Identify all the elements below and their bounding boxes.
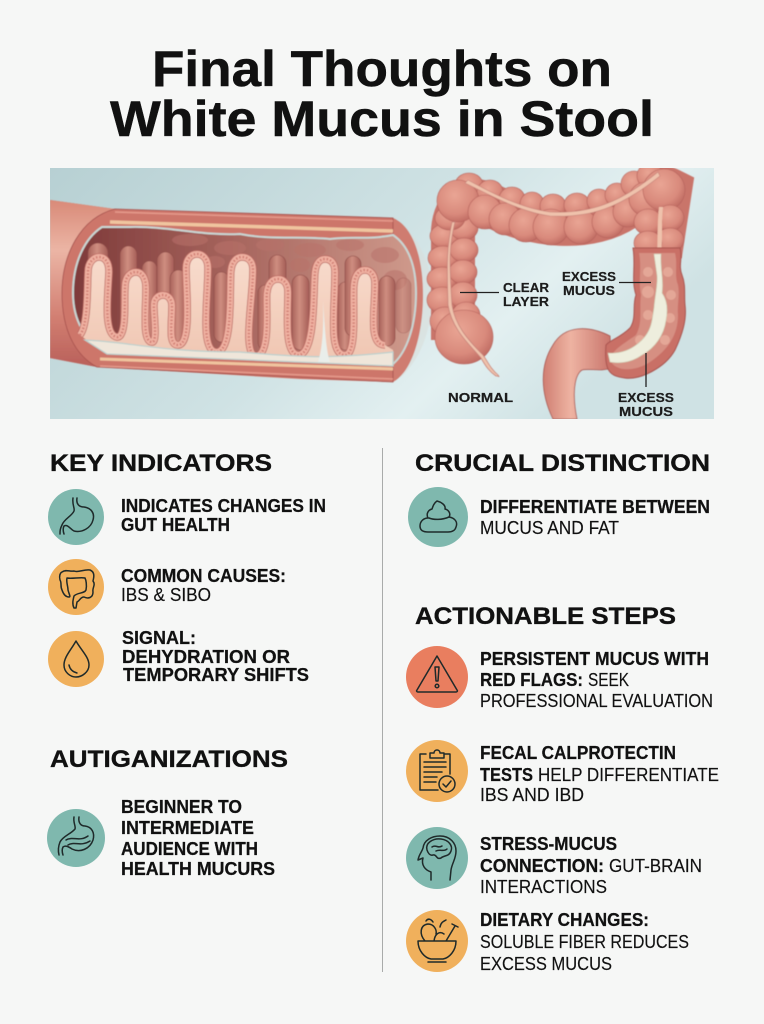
cut-open colon with excess mucus	[606, 248, 685, 378]
text: common causes	[121, 566, 286, 605]
item: dietary changes	[406, 910, 468, 972]
background folds	[88, 243, 411, 350]
text: audience: AUDIENCE WITH	[121, 839, 258, 859]
title: White Mucus in Stool	[110, 91, 654, 147]
panel: autiganizations	[47, 746, 288, 879]
text: stress-mucus connection: INTERACTIONS	[480, 877, 607, 897]
text: red flags	[480, 649, 713, 711]
text: fecal calprotectin	[480, 743, 719, 805]
item: audience	[47, 809, 105, 867]
text: gut health: GUT HEALTH	[121, 515, 230, 535]
text: stress-mucus connection: CONNECTION:	[480, 856, 604, 876]
text: fecal calprotectin: TESTS	[480, 765, 533, 785]
text: audience: INTERMEDIATE	[121, 818, 254, 838]
mucus layer	[85, 340, 393, 366]
label: excess mucus lower	[618, 353, 674, 419]
label: excess mucus upper: EXCESS	[562, 269, 616, 284]
text: mucus and fat: MUCUS AND FAT	[480, 518, 619, 538]
text: signal	[122, 628, 309, 685]
text: common causes: COMMON CAUSES:	[121, 566, 286, 586]
text: fecal calprotectin: FECAL CALPROTECTIN	[480, 743, 676, 763]
label: excess mucus lower: MUCUS	[619, 404, 673, 419]
text: signal: TEMPORARY SHIFTS	[123, 665, 309, 685]
text: fecal calprotectin: IBS AND IBD	[480, 785, 584, 805]
text: dietary changes: EXCESS MUCUS	[480, 954, 612, 974]
title	[110, 41, 654, 147]
item: red flags	[406, 646, 468, 708]
text: red flags: PROFESSIONAL EVALUATION	[480, 691, 713, 711]
text: gut health	[121, 496, 326, 535]
divider	[382, 448, 384, 972]
text: audience	[121, 797, 275, 879]
panel: crucial distinction	[408, 450, 710, 547]
intestine tube cross-section	[50, 200, 432, 382]
lumen mucosal texture	[172, 234, 407, 290]
text: stress-mucus connection	[480, 834, 702, 897]
text: stress-mucus connection: STRESS-MUCUS	[480, 834, 617, 854]
normal colon	[427, 163, 685, 377]
heading: actionable steps: ACTIONABLE STEPS	[415, 603, 676, 630]
item: common causes	[48, 559, 104, 615]
heading: key indicators: KEY INDICATORS	[50, 450, 272, 477]
text: dietary changes: DIETARY CHANGES:	[480, 910, 649, 930]
text: common causes: IBS & SIBO	[121, 585, 211, 605]
item: stress-mucus connection	[406, 827, 468, 889]
text: mucus and fat: DIFFERENTIATE BETWEEN	[480, 497, 710, 517]
label: excess mucus upper: MUCUS	[563, 283, 615, 298]
text: signal: DEHYDRATION OR	[122, 647, 290, 667]
panel: actionable steps	[406, 603, 719, 974]
label: clear layer: LAYER	[503, 294, 550, 309]
label: excess mucus upper	[562, 272, 651, 296]
text: stress-mucus connection: GUT-BRAIN	[609, 856, 702, 876]
text: red flags: SEEK	[588, 670, 629, 690]
heading: crucial distinction: CRUCIAL DISTINCTION	[415, 450, 710, 477]
text: red flags: PERSISTENT MUCUS WITH	[480, 649, 709, 669]
item: signal	[48, 631, 104, 687]
text: audience: BEGINNER TO	[121, 797, 242, 817]
label: excess mucus lower: EXCESS	[618, 390, 674, 405]
title: Final Thoughts on	[152, 41, 612, 97]
text: dietary changes: SOLUBLE FIBER REDUCES	[480, 932, 689, 952]
text: fecal calprotectin: HELP DIFFERENTIATE	[538, 765, 719, 785]
rectum	[543, 329, 612, 419]
text: audience: HEALTH MUCURS	[121, 859, 275, 879]
item: mucus and fat	[408, 487, 468, 547]
text: mucus and fat	[480, 497, 710, 538]
text: red flags: RED FLAGS:	[480, 670, 583, 690]
label: clear layer: CLEAR	[503, 280, 550, 295]
text: signal: SIGNAL:	[122, 628, 196, 648]
label: clear layer	[460, 282, 549, 306]
item: fecal calprotectin	[406, 740, 468, 802]
text: gut health: INDICATES CHANGES IN	[121, 496, 326, 516]
text: dietary changes	[480, 910, 689, 974]
item: gut health	[48, 489, 104, 545]
illustration: intestine cross-section and colon comparison	[50, 163, 714, 419]
label: normal: NORMAL	[448, 390, 513, 405]
front villi	[80, 254, 393, 362]
panel: key indicators	[48, 450, 326, 687]
heading: autiganizations: AUTIGANIZATIONS	[50, 746, 288, 773]
